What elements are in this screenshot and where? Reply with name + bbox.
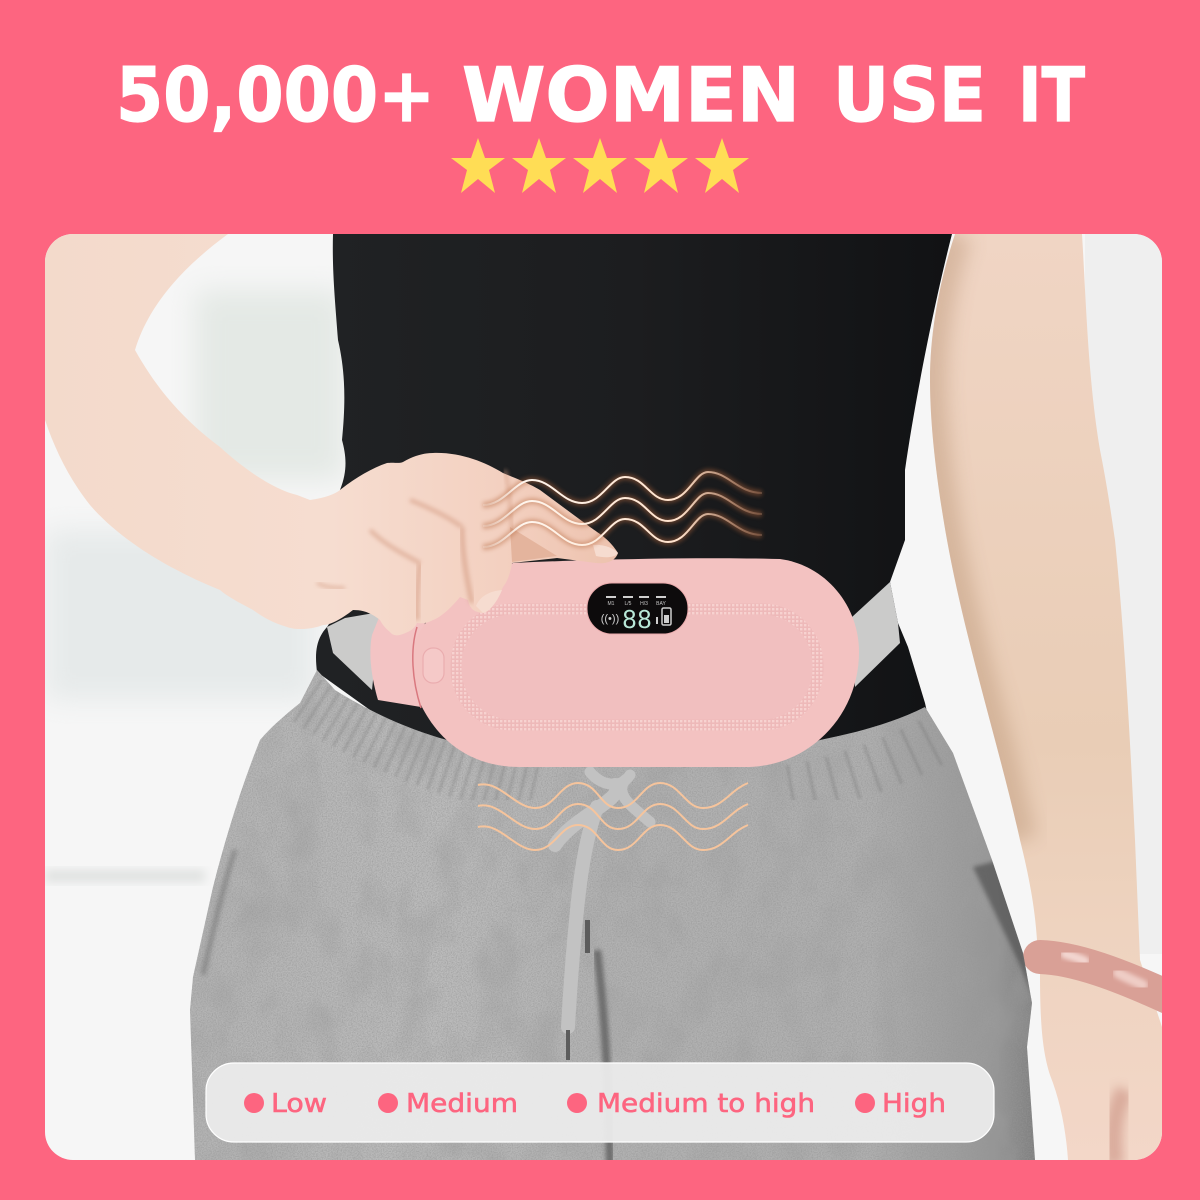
finger creases xyxy=(317,470,512,620)
panel: product photo xyxy=(45,234,1170,1165)
left side pocket seam xyxy=(203,850,235,975)
drawstring knot and cords xyxy=(555,772,650,1027)
five star rating xyxy=(451,138,749,193)
photo background room xyxy=(45,234,1165,1160)
LED display: M1 xyxy=(608,601,615,607)
finger nails xyxy=(593,545,618,557)
drawstring metal tips xyxy=(566,920,590,1060)
LED display: L/5 xyxy=(625,601,632,607)
title xyxy=(116,51,1085,139)
legend bar: intensity levels xyxy=(206,1063,994,1142)
level: medium to high: Medium to high xyxy=(597,1089,815,1119)
title: IT xyxy=(1018,51,1085,139)
jade bangle on wrist xyxy=(1040,954,1170,998)
centre crease xyxy=(597,950,610,1165)
LED display: H/3 xyxy=(640,601,648,607)
level: medium: Medium xyxy=(406,1089,518,1119)
side button xyxy=(423,648,444,683)
LED display: ((•)) xyxy=(601,613,619,625)
grey trousers xyxy=(185,660,1040,1165)
lower heat waves xyxy=(478,783,748,850)
title: 50,000+ xyxy=(116,51,435,139)
level: low xyxy=(244,1092,326,1113)
left arm and hand gripping device xyxy=(45,234,618,635)
waistband gathers xyxy=(300,690,945,790)
black top xyxy=(316,234,952,770)
level: medium xyxy=(378,1092,516,1113)
device body xyxy=(412,558,859,767)
waist belt strap xyxy=(327,582,900,690)
heating pad device xyxy=(370,558,859,767)
device clip xyxy=(370,615,425,707)
textured pad outline xyxy=(456,609,818,725)
level: low: Low xyxy=(271,1089,327,1119)
upper heat waves xyxy=(483,472,762,547)
level: high: High xyxy=(882,1089,946,1119)
pocket opening shadow xyxy=(973,860,1032,995)
LED display: BAY xyxy=(656,601,666,607)
title: WOMEN xyxy=(462,51,800,139)
right arm xyxy=(930,234,1162,1165)
title: USE xyxy=(833,51,986,139)
shaded palm gap xyxy=(510,527,557,562)
LED display xyxy=(587,583,688,637)
LED display: 88 xyxy=(622,607,652,637)
level: high xyxy=(855,1092,944,1118)
